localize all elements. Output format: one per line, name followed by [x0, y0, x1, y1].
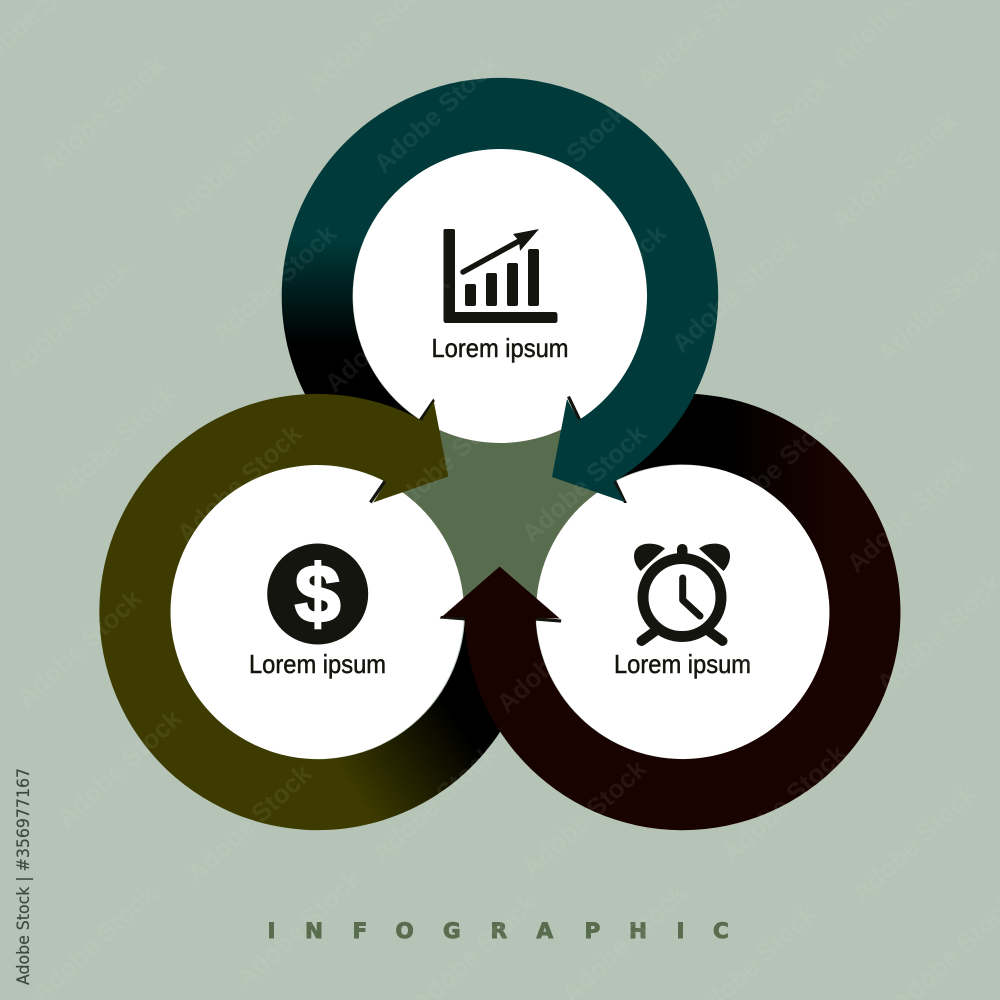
- arrow: teal ring: [360, 78, 718, 503]
- watermarks: Adobe Stock: [51, 703, 188, 834]
- title: INFOGRAPHIC: INFOGRAPHIC: [268, 919, 729, 944]
- watermarks: Adobe Stock: [11, 583, 148, 714]
- icon: alarm clock: [634, 544, 730, 641]
- arrow tails with gradient fade: [200, 117, 946, 890]
- watermarks: Adobe Stock: [231, 863, 368, 994]
- watermarks: Adobe Stock: [701, 68, 838, 199]
- watermarks: Adobe Stock: [206, 218, 343, 349]
- watermarks: Adobe Stock: [381, 393, 518, 524]
- watermarks: Adobe Stock: [846, 778, 983, 909]
- watermarks: Adobe Stock: [319, 268, 456, 399]
- watermarks: Adobe Stock: [826, 106, 963, 237]
- watermarks: Adobe Stock: [171, 418, 308, 549]
- watermarks: Adobe Stock: [366, 738, 503, 869]
- icon: bar chart with arrow: [444, 229, 558, 323]
- tail: brown arrow: [557, 329, 946, 636]
- watermarks: Adobe Stock: [496, 98, 633, 229]
- tail: teal arrow: [282, 117, 425, 484]
- tail: olive arrow: [200, 583, 590, 890]
- watermarks: Adobe Stock: [661, 608, 798, 739]
- watermarks: Adobe Stock: [709, 401, 846, 532]
- label: top circle: Lorem ipsum: [432, 333, 568, 363]
- watermarks: Adobe Stock: [162, 100, 299, 231]
- watermarks: Adobe Stock: [1, 253, 138, 384]
- watermarks: Adobe Stock: [516, 418, 653, 549]
- center triangle: [317, 296, 683, 612]
- white disks: [170, 149, 830, 759]
- watermarks: Adobe Stock: [326, 608, 463, 739]
- icon: dollar coin: $: [295, 549, 341, 640]
- arrow: brown ring: [394, 387, 941, 910]
- watermarks: Adobe Stock: [516, 753, 653, 884]
- side credit text: Adobe Stock | #356977167: [14, 768, 34, 985]
- label: right circle: Lorem ipsum: [614, 649, 751, 679]
- watermarks: Adobe Stock: [46, 378, 183, 509]
- disk: left: [170, 465, 464, 759]
- watermarks: Adobe Stock: [841, 448, 978, 579]
- label: left circle: Lorem ipsum: [249, 649, 386, 679]
- icon: dollar coin: [267, 544, 368, 644]
- disk: right: [536, 465, 830, 759]
- disk: top: [353, 149, 647, 443]
- watermarks: Adobe Stock: [666, 228, 803, 359]
- watermarks: Adobe Stock: [368, 48, 505, 179]
- watermarks: Adobe Stock: [181, 758, 318, 889]
- watermarks: Adobe Stock: [536, 218, 673, 349]
- watermarks: Adobe Stock: [491, 588, 628, 719]
- watermarks: Adobe Stock: [34, 50, 171, 181]
- arrow: olive ring: [20, 320, 567, 842]
- watermarks: Adobe Stock: [716, 738, 853, 869]
